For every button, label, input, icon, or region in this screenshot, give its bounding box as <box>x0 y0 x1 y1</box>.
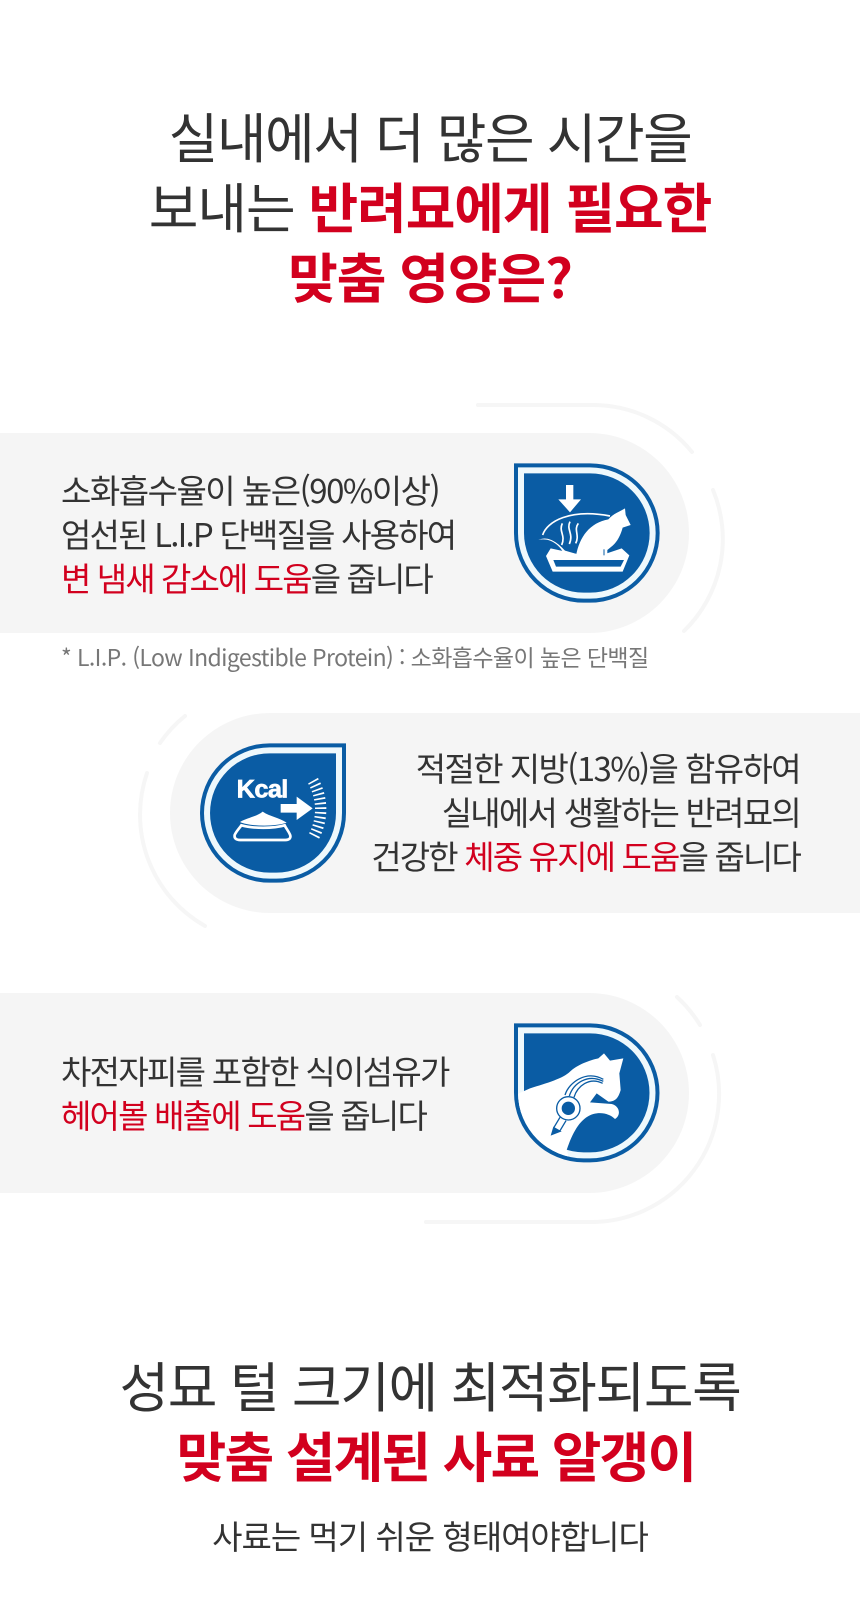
bottom heading: 성묘 털 크기에 최적화되도록 <box>120 1344 740 1423</box>
title: 실내에서 더 많은 시간을 <box>169 95 691 174</box>
text: fat benefit <box>371 743 801 879</box>
title: 보내는 반려묘에게 필요한 <box>149 165 711 244</box>
text: fat benefit: 건강한 체중 유지에 도움을 줍니다 <box>371 831 800 879</box>
bottom heading: 맞춤 설계된 사료 알갱이 <box>177 1414 695 1493</box>
text: fibre benefit: 차전자피를 포함한 식이섬유가 <box>61 1046 449 1094</box>
text: L.I.P protein benefit: 소화흡수율이 높은(90%이상) <box>61 465 439 513</box>
icon: cat grooming <box>514 1023 660 1162</box>
text: fibre benefit <box>61 1046 450 1138</box>
footnote: * L.I.P. (Low Indigestible Protein) : 소화흡수율이 높은 단백질 <box>61 639 649 673</box>
panel: L.I.P protein <box>0 433 689 633</box>
text: L.I.P protein benefit: 엄선된 L.I.P 단백질을 사용하여 <box>61 509 455 557</box>
text: L.I.P protein benefit: 변 냄새 감소에 도움을 줍니다 <box>61 553 432 601</box>
text: L.I.P protein benefit <box>61 465 455 601</box>
title <box>149 95 711 314</box>
text: fat benefit: 적절한 지방(13%)을 함유하여 <box>416 743 800 791</box>
text: fibre benefit: 헤어볼 배출에 도움을 줍니다 <box>61 1090 426 1138</box>
text: fat benefit: 실내에서 생활하는 반려묘의 <box>442 787 800 835</box>
icon: kcal bowl: Kcal <box>237 776 288 804</box>
panel: psyllium fibre <box>0 993 689 1193</box>
subheading: 사료는 먹기 쉬운 형태여야합니다 <box>212 1511 648 1559</box>
panel: fat content <box>170 713 860 913</box>
title: 맞춤 영양은? <box>288 235 572 314</box>
bottom heading <box>120 1344 740 1493</box>
